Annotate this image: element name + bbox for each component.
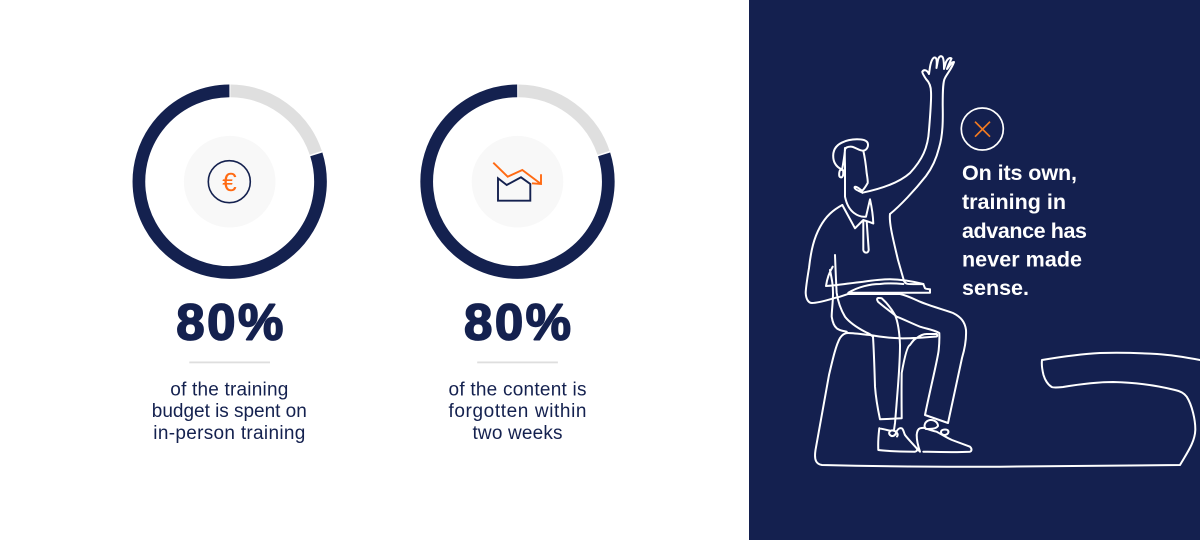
donut chart: 80% budget (139, 91, 321, 272)
donut chart: 80% forgotten (427, 91, 608, 272)
caption: content: of the content is (448, 380, 586, 400)
caption: content: forgotten within (448, 401, 586, 422)
back shoe (878, 428, 917, 452)
icon: euro coin: € (222, 167, 237, 197)
icon: declining chart (472, 136, 563, 228)
icon: euro coin (184, 136, 276, 228)
caption: budget (152, 380, 307, 444)
caption: content (448, 380, 586, 444)
divider (477, 362, 558, 363)
left arm (806, 205, 850, 303)
stat value: 80%: 80% (176, 294, 283, 350)
collar and tie (842, 199, 873, 253)
divider (189, 362, 270, 363)
floor and couch line (815, 333, 1200, 467)
panel: navy background (749, 0, 1200, 540)
statement text: never made (962, 248, 1082, 272)
caption: content: two weeks (472, 423, 562, 444)
statement text: training in (962, 190, 1066, 214)
caption: budget: in-person training (153, 423, 305, 444)
torso right side (848, 214, 930, 293)
front shoe (917, 420, 972, 452)
statement text (962, 161, 1087, 300)
icon: orange cross in circle (961, 108, 1003, 150)
statement text: advance has (962, 219, 1087, 243)
caption: budget: of the training (170, 380, 288, 400)
panel: forgetting statistic (427, 91, 608, 444)
caption: budget: budget is spent on (152, 401, 307, 422)
desk board and back (826, 267, 923, 332)
thigh and shin (848, 294, 966, 430)
illustration: line-art man raising his hand (806, 56, 1200, 467)
statement text: On its own, (962, 161, 1077, 185)
body side and back (835, 255, 937, 419)
raised arm and hand (862, 56, 954, 214)
stat value: 80%: 80% (464, 294, 571, 350)
statement text: sense. (962, 276, 1029, 300)
face profile (855, 151, 868, 193)
head and hair (833, 139, 868, 217)
panel: budget statistic (139, 91, 321, 444)
